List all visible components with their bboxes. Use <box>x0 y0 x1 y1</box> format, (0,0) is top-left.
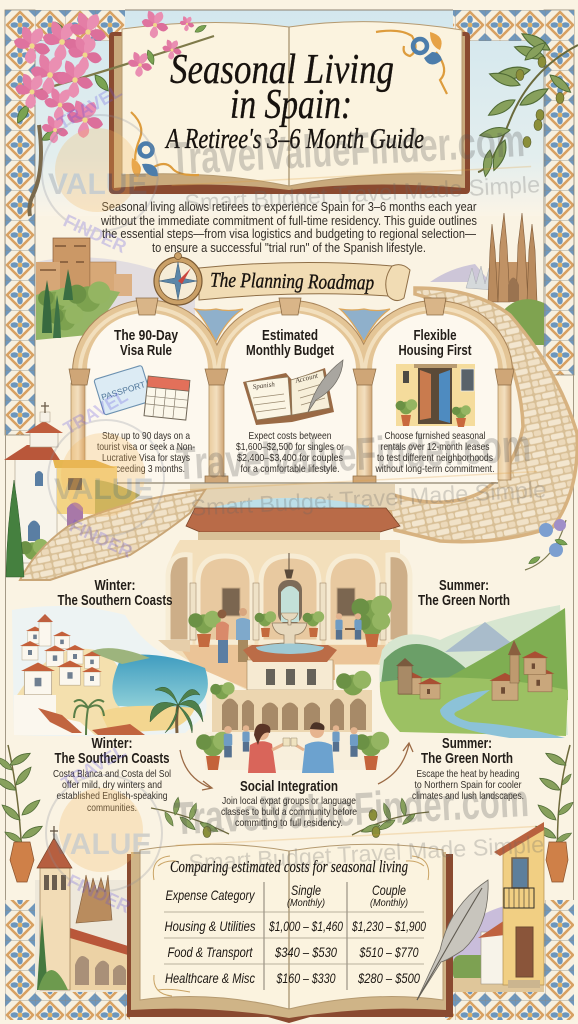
scroll banner <box>199 262 410 301</box>
courtyard roof <box>186 508 400 532</box>
title: in Spain: <box>230 82 352 128</box>
intro text: to ensure a successful "trial run" of the Spanish lifestyle. <box>152 241 426 255</box>
table title: Comparing estimated costs for seasonal living <box>170 857 408 876</box>
icon: account book and quill: Account <box>294 371 320 385</box>
card text: flexible housing: Housing First <box>398 342 472 359</box>
illustration: bougainvillea <box>14 11 214 216</box>
summer detail text: The Green North <box>421 750 513 767</box>
arrow: social to summer <box>378 743 413 784</box>
illustration: olive branch top right <box>478 30 578 177</box>
card text: monthly budget: Estimated <box>262 327 318 344</box>
watermark seal: VALUE <box>48 168 147 201</box>
winter label upper <box>58 577 172 609</box>
fountain <box>250 613 330 657</box>
illustration: Alhambra <box>36 238 195 340</box>
card text: monthly budget: for a comfortable lifestyle. <box>240 463 340 475</box>
card text: 90-day visa: Lucrative Visa for stays <box>102 452 190 464</box>
middle seal: VALUE <box>54 473 153 506</box>
card text: monthly budget: Expect costs between <box>248 430 332 442</box>
watermark seal: TRAVEL <box>54 81 125 133</box>
book corner flourishes <box>153 856 429 996</box>
watermark wordmark: Smart Budget Travel Made Simple <box>184 171 541 216</box>
social integration text <box>221 778 357 829</box>
pool and lower terrace <box>190 484 395 512</box>
icon: account book and quill: Spanish <box>252 380 276 391</box>
middle seal <box>48 386 164 562</box>
panel: housing arch <box>372 313 498 482</box>
summer detail text: climates and lush landscapes. <box>412 790 524 802</box>
ornament: bottom left corner <box>131 112 199 177</box>
terrace group <box>196 722 389 773</box>
social integration text: Social Integration <box>240 778 338 795</box>
watermark: bottom <box>46 741 545 917</box>
card text: 90-day visa: tourist visa or seek a Non- <box>97 441 195 453</box>
card text: flexible housing: to test different neighborhoods <box>377 452 493 464</box>
winter detail text: Costa Blanca and Costa del Sol <box>53 768 171 780</box>
arrow: winter to social <box>180 750 212 790</box>
columns <box>69 369 514 483</box>
bottom seal: VALUE <box>52 828 151 861</box>
panel: 90-day visa arch <box>87 313 208 482</box>
table rows <box>164 918 426 986</box>
table header: Single <box>291 882 321 898</box>
title: A Retiree's 3–6 Month Guide <box>164 124 424 155</box>
icon: account book and quill <box>243 360 343 425</box>
card text: monthly budget <box>236 327 344 475</box>
social integration text: Join local expat groups or language <box>222 795 356 807</box>
floor <box>178 645 385 690</box>
bottom seal <box>46 741 162 917</box>
card text: flexible housing: Choose furnished seasonal <box>384 430 486 442</box>
winter detail text: offer mild, dry winters and <box>62 779 162 791</box>
middle seal: FINDER <box>66 515 135 562</box>
illustration: Sagrada Familia <box>430 213 544 345</box>
card text: flexible housing: Flexible <box>414 327 456 344</box>
intro text <box>100 200 477 255</box>
illustration: right bottom Spanish house <box>440 822 544 992</box>
summer detail text: to Northern Spain for cooler <box>414 779 522 791</box>
bottom wordmark <box>173 773 545 876</box>
title book <box>109 22 470 194</box>
card text: monthly budget: Monthly Budget <box>246 342 334 359</box>
table header: Couple <box>372 882 406 898</box>
summer label upper: The Green North <box>418 592 510 609</box>
intro text: the essential steps—from visa logistics and budgeting to regional selection— <box>102 227 476 241</box>
arch bands <box>80 308 505 372</box>
card text: 90-day visa: The 90-Day <box>114 327 179 344</box>
watercolor sky background <box>35 10 544 216</box>
winter detail text: communities. <box>87 802 137 814</box>
table rows: Housing & Utilities <box>164 918 256 934</box>
table rows: $1,000 – $1,460 <box>268 918 343 934</box>
cost table book <box>127 844 453 1023</box>
bottom seal: TRAVEL <box>58 741 129 793</box>
keystones <box>136 298 446 315</box>
illustration: olive plants and urns <box>0 745 575 882</box>
illustration: blue flowers on right <box>525 519 568 570</box>
card text: flexible housing <box>375 327 494 475</box>
middle seal: TRAVEL <box>60 386 131 438</box>
table header: (Monthly) <box>370 898 408 909</box>
summer detail text: Escape the heat by heading <box>416 768 520 780</box>
watermark seal: FINDER <box>60 210 129 257</box>
icon: compass <box>154 252 202 305</box>
card text: monthly budget: $1,600–$2,500 for singles or <box>236 441 344 453</box>
table rows: Healthcare & Misc <box>165 970 255 986</box>
winter detail text: Winter: <box>92 735 132 752</box>
card text: monthly budget: $2,400–$3,400 for couples <box>237 452 343 464</box>
middle wordmark <box>175 418 547 521</box>
icon: doorway with plants <box>396 364 475 427</box>
courtyard arches <box>168 555 410 642</box>
winter label upper: The Southern Coasts <box>58 592 172 609</box>
illustration: winter southern coast <box>12 606 208 736</box>
courtyard people <box>216 608 362 663</box>
lower building <box>247 660 333 690</box>
road: left band <box>20 490 205 580</box>
title: Seasonal Living <box>170 47 394 93</box>
panel: monthly budget arch <box>225 313 356 482</box>
card text: 90-day visa: Stay up to 90 days on a <box>102 430 190 442</box>
watermark: middle <box>48 386 547 562</box>
card text: 90-day visa: Visa Rule <box>120 342 172 359</box>
bottom wordmark: Smart Budget Travel Made Simple <box>188 831 545 876</box>
social integration text: committing to full residency. <box>235 817 343 829</box>
illustration: hillside village <box>4 402 140 563</box>
summer detail text: Summer: <box>442 735 492 752</box>
table rows: $280 – $500 <box>357 970 420 986</box>
lower arcade <box>212 690 372 735</box>
watermark: top <box>42 81 541 257</box>
intro text: Seasonal living allows retirees to experience Spain for 3–6 months each year <box>102 200 476 214</box>
icon: passport and calendar: PASSPORT <box>100 379 146 402</box>
illustration: summer green north <box>379 605 568 738</box>
icon: passport and calendar <box>94 365 190 420</box>
banner heading: The Planning Roadmap <box>210 268 374 294</box>
icon: cypress <box>6 480 24 577</box>
bottom seal: FINDER <box>64 870 133 917</box>
social integration text: classes to build a community before <box>221 806 357 818</box>
ornament: top right corner <box>376 31 447 94</box>
illustration: olive sprigs <box>151 797 429 838</box>
illustration: left bottom tower and cathedral <box>35 826 128 992</box>
table header: Expense Category <box>166 887 255 903</box>
illustration: courtyard <box>158 508 412 773</box>
icon: feather quill <box>417 880 488 1000</box>
winter detail text: established English-speaking <box>56 790 168 802</box>
card text: 90-day visa <box>97 327 195 475</box>
table rows: $160 – $330 <box>276 970 336 986</box>
summer label upper: Summer: <box>439 577 489 594</box>
middle wordmark: Smart Budget Travel Made Simple <box>190 476 547 521</box>
card text: flexible housing: rentals over 12-month leases <box>380 441 490 453</box>
table rows: $1,230 – $1,900 <box>351 918 426 934</box>
courtyard plants <box>188 596 392 647</box>
intro text: without the immediate commitment of full-time residency. This guide outlines <box>100 214 477 228</box>
table header: (Monthly) <box>287 898 325 909</box>
watermark wordmark <box>169 113 541 216</box>
spandrel ornaments <box>195 309 390 342</box>
winter detail text <box>53 735 171 814</box>
winter label upper: Winter: <box>94 577 136 594</box>
summer label upper <box>418 577 510 609</box>
watermark seal <box>42 81 158 257</box>
planning arches <box>69 298 514 483</box>
title <box>164 47 424 155</box>
palm <box>150 687 203 733</box>
card text: flexible housing: without long-term commitment. <box>375 463 494 475</box>
table header <box>166 882 408 909</box>
winter detail text: The Southern Coasts <box>54 750 170 767</box>
table rows: $510 – $770 <box>359 944 419 960</box>
table rules <box>164 882 424 990</box>
table rows: $340 – $530 <box>274 944 337 960</box>
summer detail text <box>412 735 524 802</box>
table rows: Food & Transport <box>168 944 253 960</box>
card text: 90-day visa: exceeding 3 months. <box>107 463 185 475</box>
roadmap banner with compass <box>154 252 410 305</box>
road: right curve <box>385 288 577 542</box>
